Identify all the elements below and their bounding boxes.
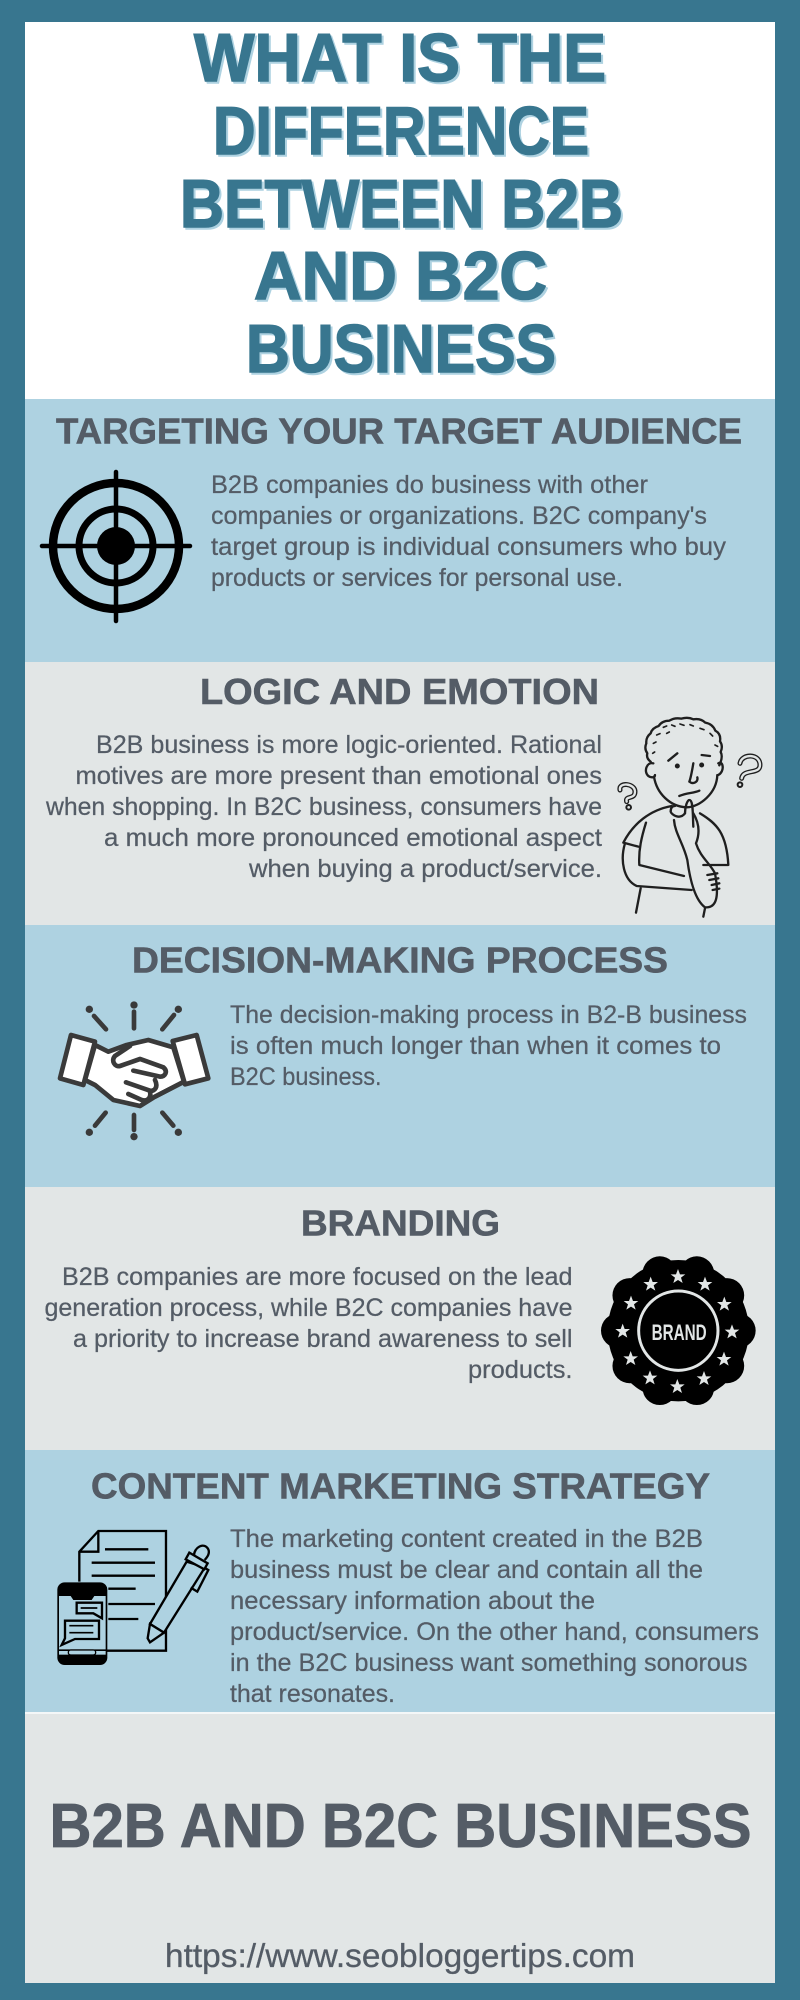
panel: title: WHAT IS THE xyxy=(196,22,608,98)
text: targeting body: companies or organizations. B2C company's xyxy=(211,502,707,530)
heading: content marketing: CONTENT MARKETING STRATEGY xyxy=(91,1466,710,1506)
text: content body: The marketing content created in the B2B xyxy=(230,1525,703,1553)
panel: targeting your target audience xyxy=(25,399,775,662)
heading: branding: BRANDING xyxy=(301,1202,500,1244)
heading: targeting: TARGETING YOUR TARGET AUDIENCE xyxy=(56,410,742,452)
panel: decision-making process xyxy=(25,925,775,1187)
panel: content marketing strategy xyxy=(25,1450,775,1712)
text: website url: https://www.seobloggertips.com xyxy=(165,1937,635,1974)
text: branding body: B2B companies are more focused on the lead xyxy=(62,1263,572,1291)
panel: title: AND B2C xyxy=(256,240,549,316)
panel: title: DIFFERENCE xyxy=(215,95,591,171)
text: branding body: a priority to increase brand awareness to sell xyxy=(73,1325,572,1353)
panel: title: BUSINESS xyxy=(246,311,556,387)
panel: logic and emotion xyxy=(25,662,775,925)
text: logic body: a much more pronounced emotional aspect xyxy=(104,824,602,852)
text: targeting body xyxy=(211,471,727,592)
text: logic body xyxy=(45,731,602,883)
panel: title xyxy=(25,20,775,399)
icon: handshake xyxy=(60,1001,208,1140)
text: targeting body: products or services for personal use. xyxy=(211,564,623,592)
text: content body xyxy=(230,1525,759,1708)
text: decision body xyxy=(230,1001,747,1091)
text: logic body: when shopping. In B2C business, consumers have xyxy=(45,793,602,821)
text: branding body: generation process, while B2C companies have xyxy=(44,1294,572,1322)
text: branding body xyxy=(44,1263,572,1384)
icon: thinking person with question marks xyxy=(620,718,760,917)
text: logic body: when buying a product/service. xyxy=(248,855,602,883)
icon: brand badge xyxy=(601,1256,756,1405)
icon: brand badge: BRAND xyxy=(652,1320,707,1345)
icon: document, phone and pen xyxy=(57,1531,209,1665)
text: decision body: is often much longer than when it comes to xyxy=(230,1032,721,1060)
text: targeting body: B2B companies do business with other xyxy=(211,471,648,499)
text: logic body: B2B business is more logic-oriented. Rational xyxy=(96,731,602,759)
text: branding body: products. xyxy=(468,1356,572,1384)
panel: footer xyxy=(25,1712,775,1983)
text: logic body: motives are more present than emotional ones xyxy=(76,762,602,790)
text: decision body: The decision-making process in B2-B business xyxy=(230,1001,747,1029)
text: decision body: B2C business. xyxy=(230,1063,382,1091)
text: content body: that resonates. xyxy=(230,1680,395,1708)
panel: title: DIFFERENCE xyxy=(213,93,589,169)
heading: decision-making: DECISION-MAKING PROCESS xyxy=(132,940,668,980)
panel: branding xyxy=(25,1187,775,1450)
panel: title: BUSINESS xyxy=(248,313,558,389)
panel: title: AND B2C xyxy=(254,238,547,314)
text: content body: necessary information about the xyxy=(230,1587,595,1615)
icon: target xyxy=(42,472,190,621)
text: targeting body: target group is individual consumers who buy xyxy=(211,533,727,561)
heading: b2b and b2c business: B2B AND B2C BUSINESS xyxy=(50,1792,752,1861)
panel: title: WHAT IS THE xyxy=(194,20,606,96)
panel: title: BETWEEN B2B xyxy=(182,168,625,244)
heading: logic and emotion: LOGIC AND EMOTION xyxy=(200,671,599,712)
text: content body: business must be clear and contain all the xyxy=(230,1556,703,1584)
text: content body: product/service. On the other hand, consumers xyxy=(230,1618,759,1646)
text: content body: in the B2C business want something sonorous xyxy=(230,1649,748,1677)
panel: title: BETWEEN B2B xyxy=(180,166,623,242)
